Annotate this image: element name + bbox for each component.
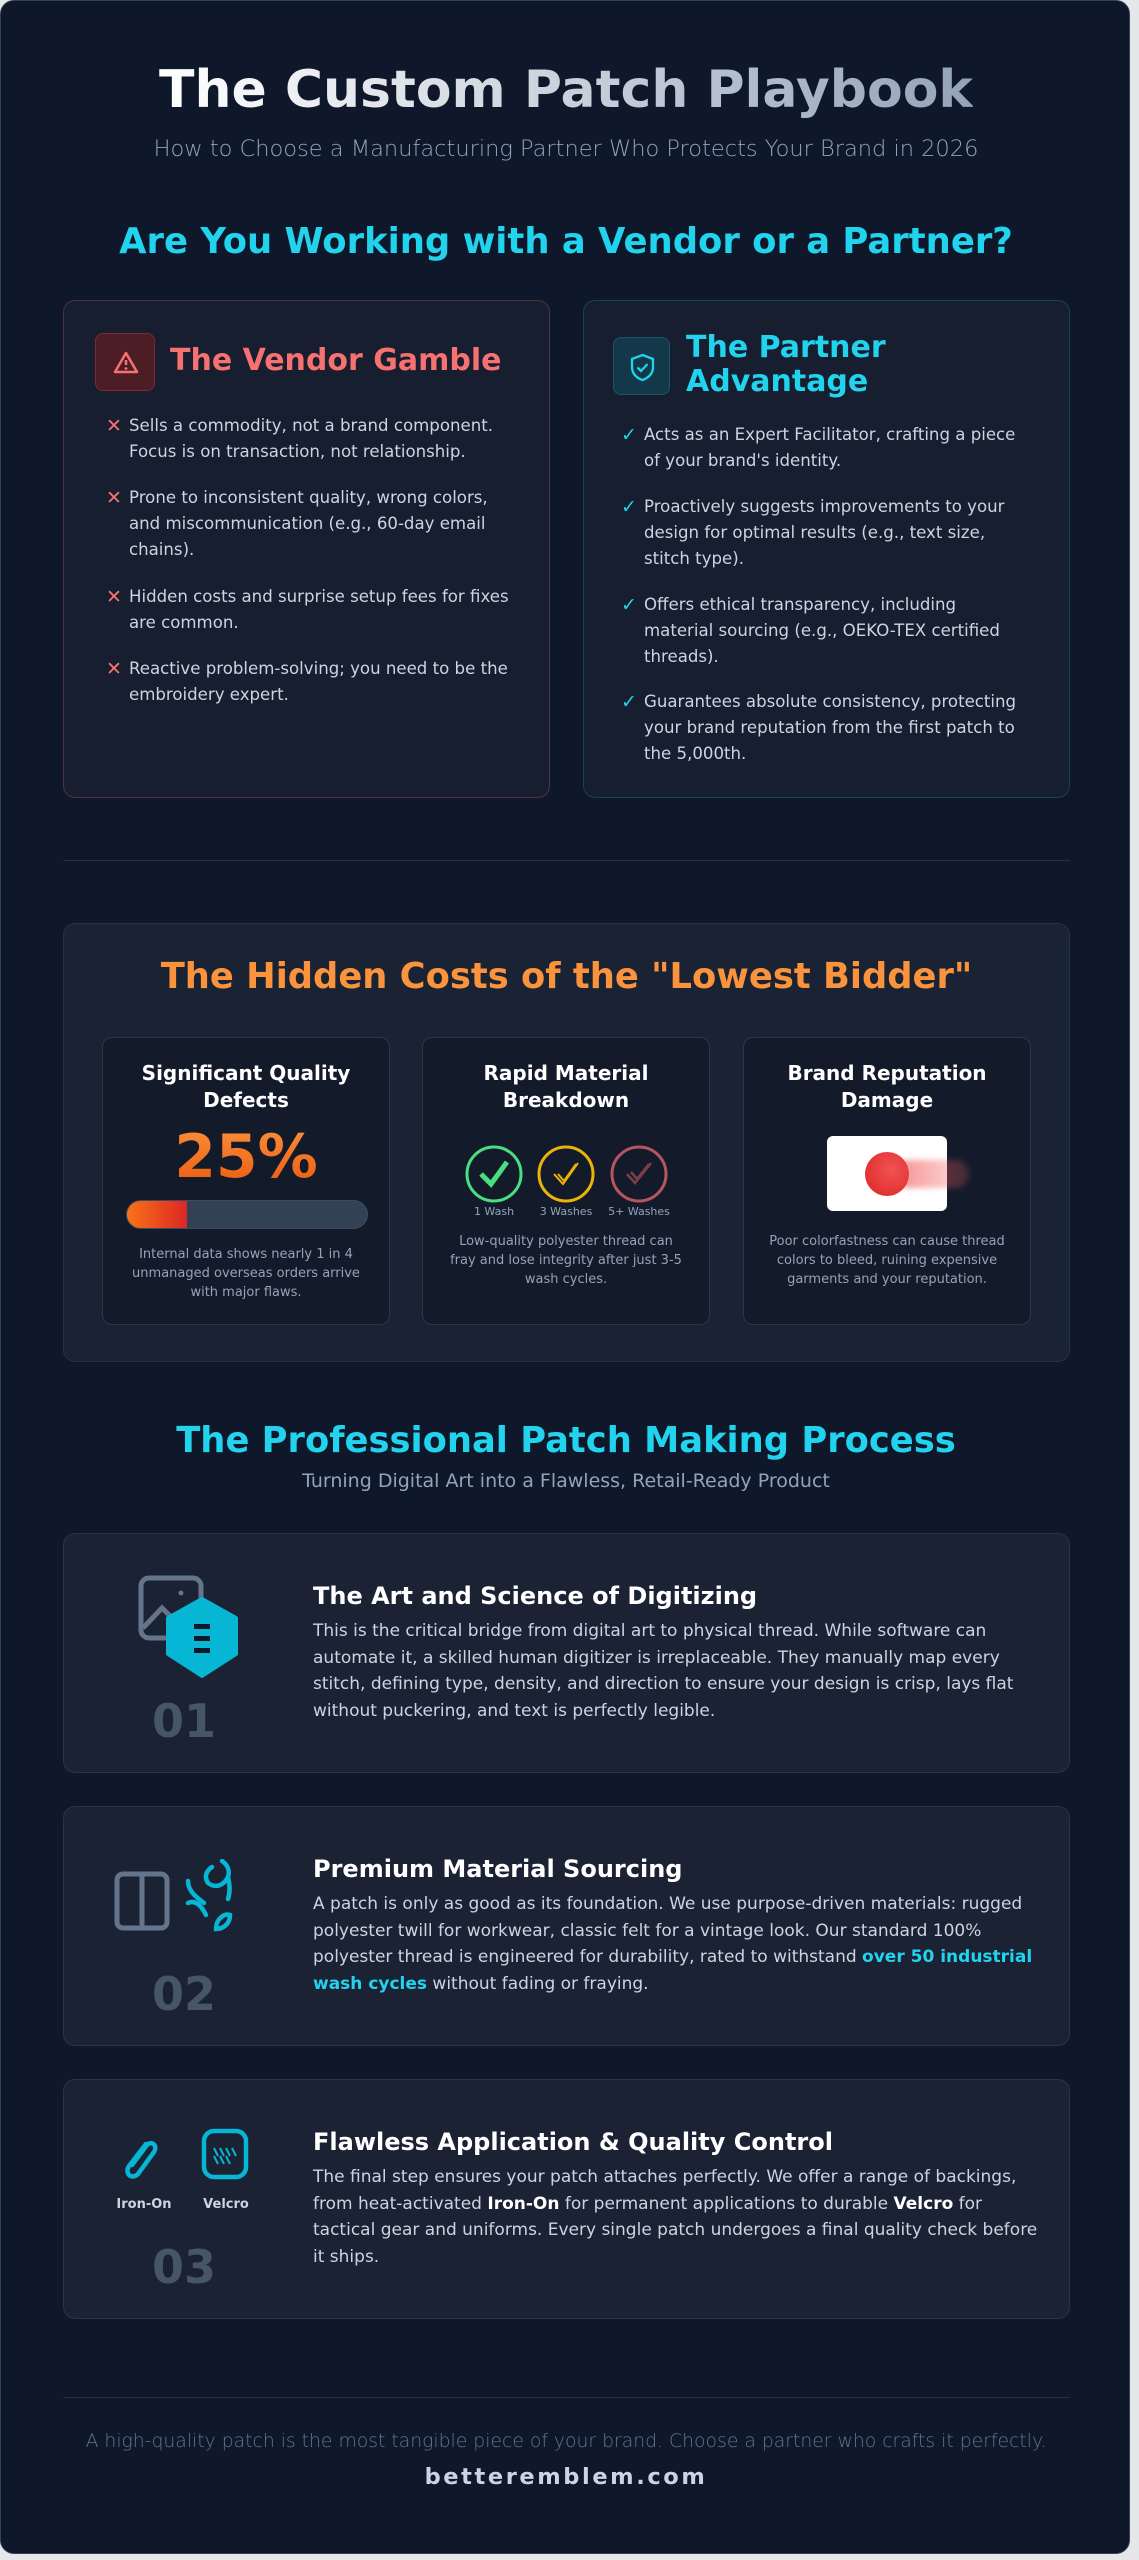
- icon: image to hex: [138, 1576, 238, 1678]
- number 01: 01: [152, 1694, 216, 1748]
- text: materials: A patch is only as good as its foundation. We use purpose-driven materials: rugged polyester twill for workwear, classic felt for a vintage look. Our standard 100% polyester thread is engineered for durability, rated to withstand over 50 industrial wash cycles without fading or fraying.: [313, 1894, 1032, 1994]
- list: vendor issues: ✕: [106, 586, 122, 608]
- heading: partner advantage: Advantage: [686, 364, 868, 399]
- icon: wash circles: 3 Washes: [540, 1205, 593, 1218]
- list: vendor issues: [106, 415, 509, 704]
- step 2: materials: [63, 1806, 1070, 2046]
- heading: partner advantage: [686, 330, 886, 399]
- list: partner benefits: ✓: [621, 424, 637, 446]
- title: The Custom Patch Playbook: [159, 60, 973, 120]
- list: vendor issues: Prone to inconsistent quality, wrong colors, and miscommunication (e.g., 60-day email chains).: [129, 488, 488, 559]
- icon: wash circles: 5+ Washes: [608, 1205, 670, 1218]
- list: vendor issues: ✕: [106, 658, 122, 680]
- step 1: digitizing: [63, 1533, 1070, 1773]
- heading: vendor gamble: The Vendor Gamble: [170, 343, 501, 378]
- heading: partner advantage: The Partner: [686, 330, 886, 365]
- list: vendor issues: Reactive problem-solving; you need to be the embroidery expert.: [129, 659, 508, 704]
- icon: fabric and thread: [114, 1859, 232, 1932]
- subheading: process: Turning Digital Art into a Flawless, Retail-Ready Product: [302, 1470, 830, 1492]
- card: quality defects: Significant Quality: [142, 1061, 350, 1085]
- subtitle: How to Choose a Manufacturing Partner Who Protects Your Brand in 2026: [154, 136, 978, 162]
- list: vendor issues: ✕: [106, 487, 122, 509]
- list: partner benefits: Offers ethical transparency, including material sourcing (e.g., OEKO-TEX certified threads).: [644, 595, 1000, 666]
- stat: 25%: 25%: [174, 1122, 318, 1192]
- card: quality defects: [102, 1037, 390, 1325]
- icon: iron-on and velcro: Velcro: [203, 2197, 249, 2212]
- list: partner benefits: [621, 424, 1016, 763]
- card: material breakdown: Rapid Material: [484, 1061, 648, 1085]
- list: partner benefits: ✓: [621, 691, 637, 713]
- step 3: application: [63, 2079, 1070, 2319]
- card: quality defects: Internal data shows nearly 1 in 4 unmanaged overseas orders arrive with major flaws.: [132, 1247, 360, 1300]
- card: material breakdown: Breakdown: [503, 1088, 629, 1112]
- icon: warning: [95, 333, 155, 391]
- list: partner benefits: Guarantees absolute consistency, protecting your brand reputation from the first patch to the 5,000th.: [644, 692, 1016, 763]
- card: brand damage: Damage: [841, 1088, 933, 1112]
- panel: partner advantage: [583, 300, 1070, 798]
- list: partner benefits: ✓: [621, 594, 637, 616]
- list: partner benefits: ✓: [621, 496, 637, 518]
- heading: application: Flawless Application & Quality Control: [313, 2128, 833, 2156]
- card: quality defects: Defects: [203, 1088, 289, 1112]
- list: partner benefits: Acts as an Expert Facilitator, crafting a piece of your brand's identity.: [644, 425, 1015, 470]
- heading: hidden costs: The Hidden Costs of the "Lowest Bidder": [161, 956, 972, 997]
- card: material breakdown: Low-quality polyester thread can fray and lose integrity after just 3-5 wash cycles.: [450, 1234, 682, 1287]
- footer tagline: A high-quality patch is the most tangible piece of your brand. Choose a partner who crafts it perfectly.: [86, 2431, 1046, 2452]
- heading: materials: Premium Material Sourcing: [313, 1855, 682, 1883]
- list: vendor issues: Hidden costs and surprise setup fees for fixes are common.: [129, 587, 509, 632]
- number 02: 02: [152, 1967, 216, 2021]
- list: vendor issues: ✕: [106, 415, 122, 437]
- text: application: The final step ensures your patch attaches perfectly. We offer a range of backings, from heat-activated Iron-On for permanent applications to durable Velcro for tactical gear and uniforms. Every single patch undergoes a final quality check before it ships.: [313, 2167, 1037, 2266]
- footer url: betteremblem.com: [425, 2464, 707, 2490]
- text: digitizing: This is the critical bridge from digital art to physical thread. While software can automate it, a skilled human digitizer is irreplaceable. They manually map every stitch, defining type, density, and direction to ensure your design is crisp, lays flat without puckering, and text is perfectly legible.: [313, 1621, 1013, 1720]
- list: partner benefits: Proactively suggests improvements to your design for optimal results (e.g., text size, stitch type).: [644, 497, 1004, 568]
- heading: process: The Professional Patch Making Process: [176, 1420, 956, 1461]
- heading: vendor or partner: Are You Working with a Vendor or a Partner?: [119, 221, 1013, 262]
- card: material breakdown: [422, 1037, 710, 1325]
- icon: iron-on and velcro: Iron-On: [116, 2197, 172, 2212]
- progress bar: [126, 1200, 368, 1229]
- panel: vendor gamble: [63, 300, 550, 798]
- card: brand damage: Poor colorfastness can cause thread colors to bleed, ruining expensive garments and your reputation.: [769, 1234, 1005, 1287]
- icon: iron-on and velcro: [116, 2128, 249, 2212]
- icon: bleeding patch: [827, 1136, 947, 1211]
- panel: hidden costs: [63, 923, 1070, 1362]
- icon: shield: [613, 337, 670, 395]
- number 03: 03: [152, 2240, 216, 2294]
- icon: wash circles: 1 Wash: [474, 1205, 514, 1218]
- card: brand damage: Brand Reputation: [787, 1061, 987, 1085]
- card: brand damage: [743, 1037, 1031, 1325]
- list: vendor issues: Sells a commodity, not a brand component. Focus is on transaction, not relationship.: [129, 416, 493, 461]
- icon: wash circles: [466, 1146, 670, 1218]
- heading: digitizing: The Art and Science of Digitizing: [313, 1582, 757, 1610]
